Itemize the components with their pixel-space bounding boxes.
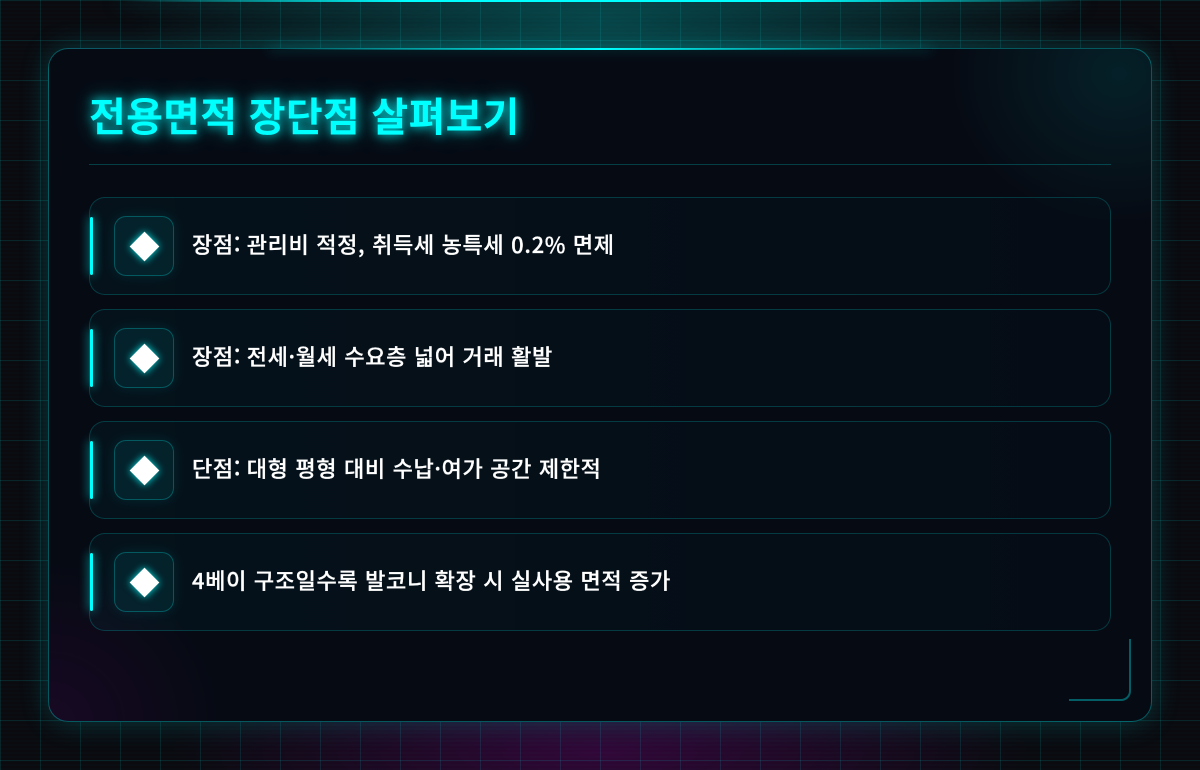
item text 1: 장점: 관리비 적정, 취득세 농특세 0.2% 면제 [192,228,615,260]
card top accent bar [268,48,932,50]
accent bar 3 [90,441,93,499]
list item 4 [89,533,1111,631]
icon: diamond 4 [114,552,174,612]
accent bar 4 [90,553,93,611]
list item 3 [89,421,1111,519]
accent bar 2 [90,329,93,387]
list item 2 [89,309,1111,407]
item text 3: 단점: 대형 평형 대비 수납·여가 공간 제한적 [192,452,602,484]
title: 전용면적 장단점 살펴보기 [89,85,520,143]
corner bracket [1069,639,1131,701]
item text 4: 4베이 구조일수록 발코니 확장 시 실사용 면적 증가 [192,564,671,596]
icon: diamond 3 [114,440,174,500]
icon: diamond 2 [114,328,174,388]
list item 1 [89,197,1111,295]
accent bar 1 [90,217,93,275]
item text 2: 장점: 전세·월세 수요층 넓어 거래 활발 [192,340,553,372]
top neon bar [120,0,1080,2]
icon: diamond 1 [114,216,174,276]
